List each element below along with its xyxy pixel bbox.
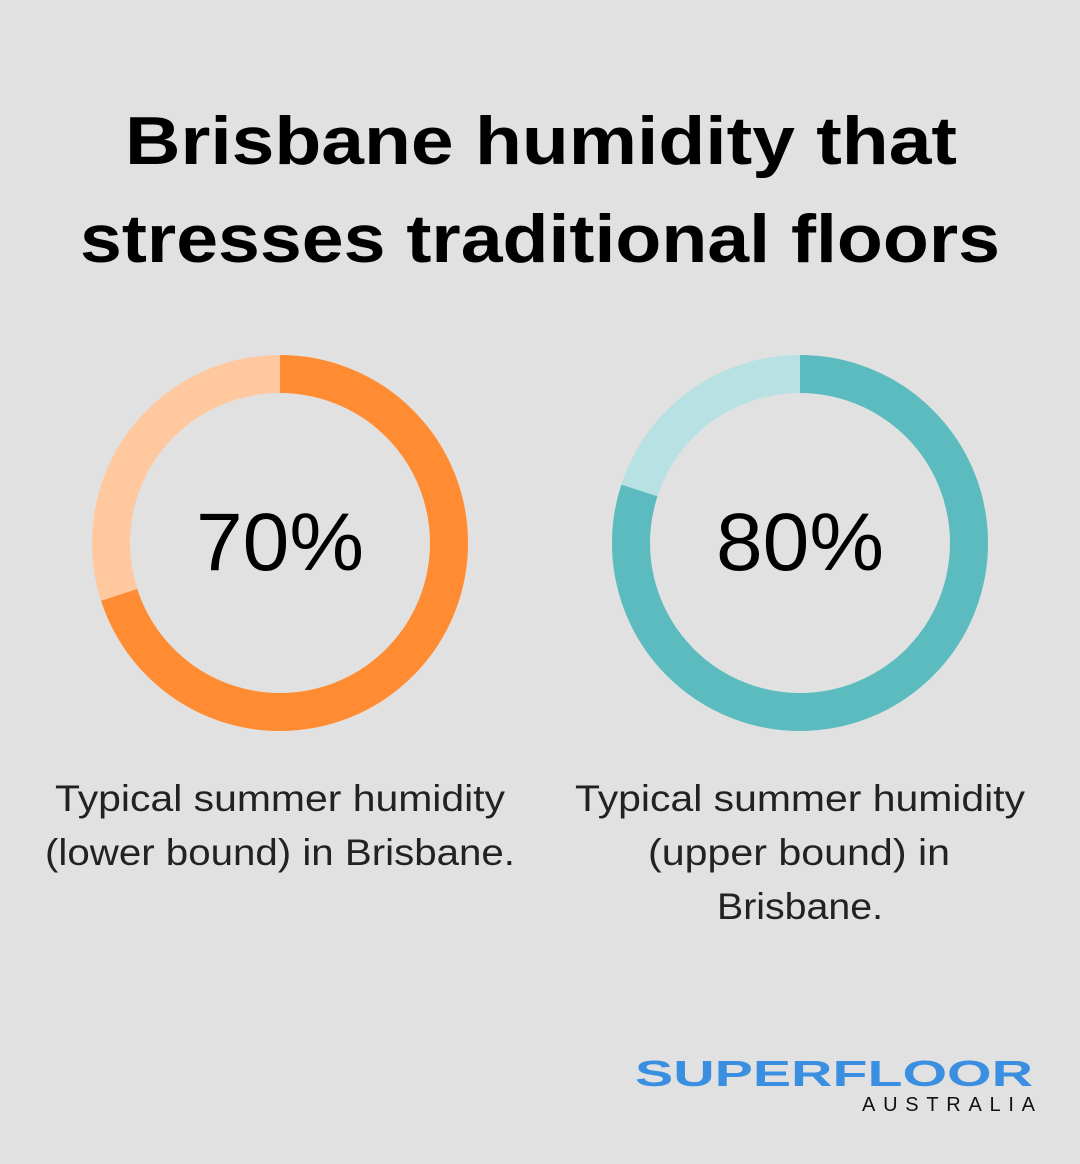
caption: lower bound: Typical summer humidity (55, 778, 506, 819)
donut chart: 70% (111, 374, 449, 712)
donut chart: 70%: 70% (196, 497, 364, 588)
donut chart: 80%: 80% (716, 497, 884, 588)
caption: upper bound (575, 778, 1026, 927)
caption: upper bound: Brisbane. (717, 886, 883, 927)
caption: lower bound: (lower bound) in Brisbane. (45, 832, 515, 873)
logo: Superfloor Australia: AUSTRALIA (862, 1094, 1036, 1116)
logo: Superfloor Australia (635, 1053, 1036, 1116)
caption: lower bound (45, 778, 515, 873)
title: stresses traditional floors (80, 201, 1000, 277)
caption: upper bound: Typical summer humidity (575, 778, 1026, 819)
title (80, 103, 1000, 277)
logo: Superfloor Australia: SUPERFLOOR (635, 1053, 1033, 1094)
caption: upper bound: (upper bound) in (648, 832, 950, 873)
title: Brisbane humidity that (125, 103, 957, 179)
donut chart: 80% (631, 374, 969, 712)
